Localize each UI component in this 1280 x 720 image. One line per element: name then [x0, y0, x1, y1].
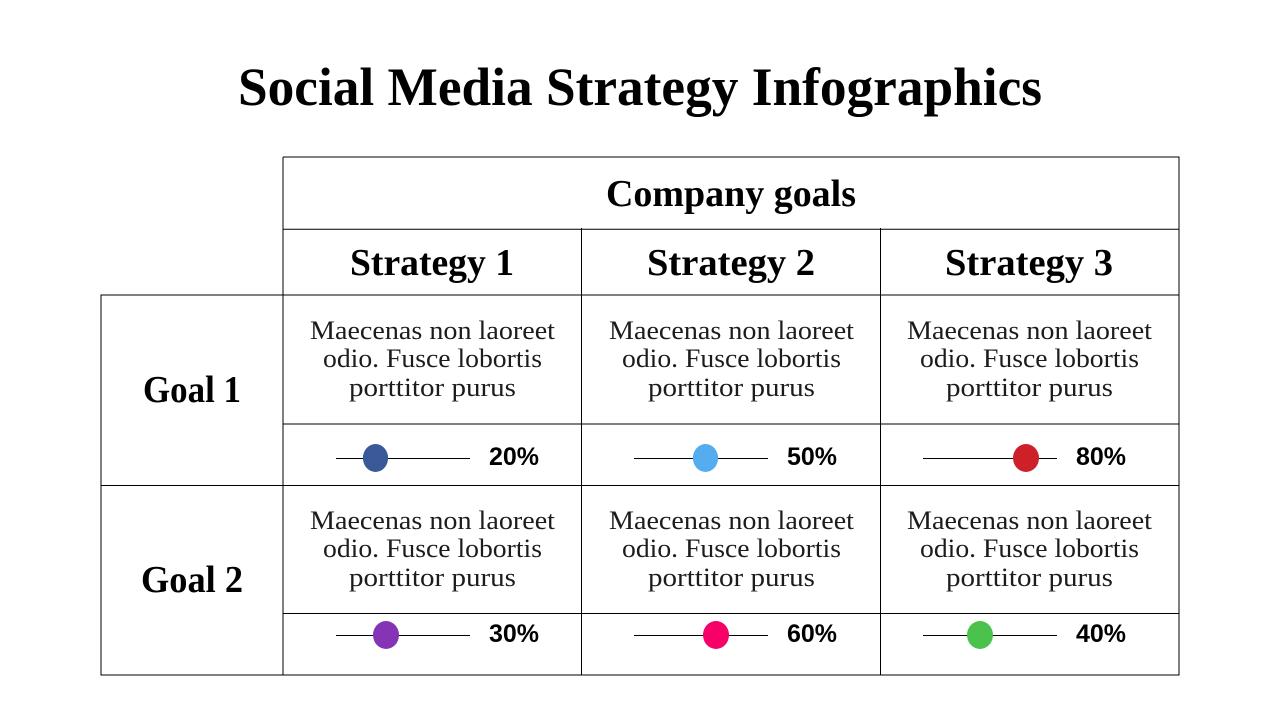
text block: goal 1 strategy 2: porttitor purus	[648, 372, 815, 402]
slider: goal 1 strategy 3, 80%	[923, 443, 1126, 472]
text block: goal 1 strategy 1: porttitor purus	[349, 372, 516, 402]
text block: goal 1 strategy 3: Maecenas non laoreet	[907, 315, 1153, 345]
slider: goal 1 strategy 2, 50%: 50%	[787, 443, 837, 471]
text block: goal 1 strategy 2: Maecenas non laoreet	[609, 315, 855, 345]
text block: goal 2 strategy 2: Maecenas non laoreet	[609, 505, 855, 535]
slider: goal 2 strategy 3, 40%	[923, 620, 1126, 649]
text block: goal 1 strategy 3: odio. Fusce lobortis	[920, 343, 1139, 373]
text block: goal 1 strategy 3: porttitor purus	[946, 372, 1113, 402]
text block: goal 2 strategy 3: Maecenas non laoreet	[907, 505, 1153, 535]
text block: goal 2 strategy 1: odio. Fusce lobortis	[323, 533, 542, 563]
slider: goal 2 strategy 1, 30%: 30%	[489, 620, 539, 648]
text block: goal 2 strategy 1: Maecenas non laoreet	[310, 505, 556, 535]
slider: goal 1 strategy 2, 50%	[634, 443, 837, 472]
row heading: goal 2: Goal 2	[141, 559, 243, 601]
slider: goal 1 strategy 3, 80%: 80%	[1076, 443, 1126, 471]
slider: goal 2 strategy 2, 60%	[634, 620, 837, 649]
text block: goal 2 strategy 1	[310, 505, 556, 592]
text block: goal 2 strategy 3: porttitor purus	[946, 562, 1113, 592]
slider: goal 2 strategy 3, 40%: 40%	[1076, 620, 1126, 648]
text block: goal 2 strategy 2: odio. Fusce lobortis	[622, 533, 841, 563]
text block: goal 2 strategy 3: odio. Fusce lobortis	[920, 533, 1139, 563]
text block: goal 1 strategy 3	[907, 315, 1153, 402]
row heading: goal 1: Goal 1	[143, 369, 241, 411]
column headings	[350, 242, 1113, 284]
slider: goal 1 strategy 1, 20%	[336, 443, 539, 472]
text block: goal 1 strategy 1: odio. Fusce lobortis	[323, 343, 542, 373]
slider: goal 2 strategy 1, 30%	[336, 620, 539, 649]
text block: goal 1 strategy 2	[609, 315, 855, 402]
text block: goal 1 strategy 1	[310, 315, 556, 402]
column headings: Strategy 2	[647, 242, 815, 284]
text block: goal 1 strategy 2: odio. Fusce lobortis	[622, 343, 841, 373]
table grid	[101, 157, 1179, 675]
title: Social Media Strategy Infographics	[238, 57, 1042, 117]
text block: goal 2 strategy 3	[907, 505, 1153, 592]
column headings: Strategy 3	[945, 242, 1113, 284]
text block: goal 2 strategy 2: porttitor purus	[648, 562, 815, 592]
column headings: Strategy 1	[350, 242, 514, 284]
text block: goal 1 strategy 1: Maecenas non laoreet	[310, 315, 556, 345]
heading: company goals: Company goals	[606, 173, 856, 215]
text block: goal 2 strategy 1: porttitor purus	[349, 562, 516, 592]
slider: goal 1 strategy 1, 20%: 20%	[489, 443, 539, 471]
text block: goal 2 strategy 2	[609, 505, 855, 592]
slider: goal 2 strategy 2, 60%: 60%	[787, 620, 837, 648]
